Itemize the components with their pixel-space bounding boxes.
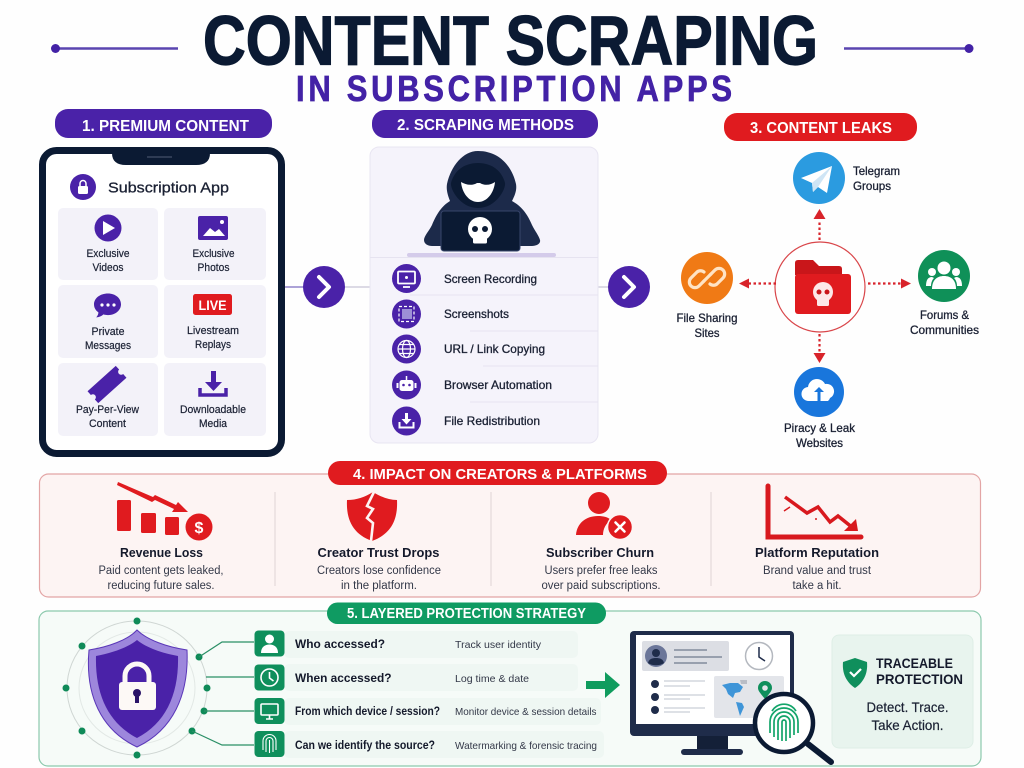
impact: creator trust drops: [317, 492, 441, 592]
impact: revenue loss: [98, 482, 224, 592]
connector lines between panels: [285, 286, 610, 288]
row: can we identify the source: Watermarking & forensic tracing: [455, 740, 597, 752]
magnifier with fingerprint: [755, 694, 831, 762]
impact: platform reputation: take a hit.: [792, 580, 842, 592]
heading: 2. scraping methods: [372, 110, 598, 138]
panel: scraping methods: [370, 147, 598, 443]
method: screen recording: Screen Recording: [444, 272, 537, 286]
world map with pin: [714, 676, 784, 718]
leak hub folder with skull: [775, 242, 865, 332]
icon: lock badge: [70, 174, 96, 200]
callout: traceable protection: TRACEABLE: [876, 655, 953, 671]
leak: telegram groups: [793, 152, 900, 204]
row: who accessed: Who accessed?: [295, 637, 385, 651]
method: screenshots: [392, 300, 509, 328]
impact: subscriber churn: [542, 492, 660, 592]
leak: file sharing sites: File Sharing: [676, 311, 738, 325]
panel: impact on creators and platforms: [40, 461, 980, 597]
card: pay-per-view content: [58, 363, 158, 436]
method: browser automation: [392, 370, 552, 400]
profile card: [642, 641, 729, 671]
impact: platform reputation: [755, 486, 879, 592]
impact: subscriber churn: Subscriber Churn: [546, 545, 654, 560]
arrows from hub: [739, 209, 911, 363]
leak: piracy and leak websites: Piracy & Leak: [784, 421, 856, 435]
card: downloadable media: Media: [199, 418, 228, 430]
card: downloadable media: [164, 363, 266, 436]
card: exclusive photos: Exclusive: [192, 248, 234, 260]
card: downloadable media: Downloadable: [180, 404, 246, 416]
title ornament right: [844, 44, 974, 53]
arrow: scraping methods to content leaks: [608, 266, 650, 308]
activity list: [651, 680, 705, 714]
card: pay-per-view content: Pay-Per-View: [76, 404, 139, 416]
impact: platform reputation: Platform Reputation: [755, 545, 879, 560]
heading: 2. scraping methods: 2. SCRAPING METHODS: [397, 117, 574, 134]
card: livestream replays: [164, 285, 266, 358]
impact: revenue loss: reducing future sales.: [108, 580, 214, 592]
heading: 4. impact: 4. IMPACT ON CREATORS & PLATFORMS: [353, 466, 647, 483]
card: pay-per-view content: Content: [89, 418, 126, 430]
method: url link copying: [392, 334, 545, 364]
leak: telegram groups: Groups: [853, 179, 891, 193]
card: exclusive photos: [164, 208, 266, 280]
clock: [746, 642, 772, 670]
impact: subscriber churn: over paid subscriptions.: [542, 580, 660, 592]
leak: forums and communities: [910, 250, 979, 337]
row: when accessed: When accessed?: [295, 671, 392, 685]
card: exclusive videos: Exclusive: [86, 248, 130, 260]
skull on laptop: [468, 217, 492, 244]
row: can we identify the source: Can we identify the source?: [295, 738, 435, 752]
callout: traceable protection: Take Action.: [872, 717, 944, 733]
card: livestream replays: Livestream: [187, 325, 239, 337]
callout: traceable protection: [832, 635, 973, 748]
heading: 3. content leaks: [724, 113, 917, 141]
impact: subscriber churn: Users prefer free leaks: [544, 565, 658, 577]
leak: file sharing sites: Sites: [694, 326, 720, 340]
impact: revenue loss: Revenue Loss: [120, 545, 203, 560]
icon: shield with lock and orbit: [62, 618, 210, 758]
panel: phone subscription app: [42, 150, 282, 454]
impact: revenue loss: Paid content gets leaked,: [98, 565, 224, 577]
impact: platform reputation: Brand value and trust: [763, 565, 872, 577]
card: private messages: Messages: [85, 340, 131, 352]
phone notch: [112, 150, 210, 165]
row: from which device or session: [254, 698, 601, 725]
impact: creator trust drops: Creators lose confidence: [317, 565, 441, 577]
icon: shield check: [843, 658, 867, 688]
method: screenshots: Screenshots: [444, 307, 509, 321]
row: from which device or session: From which device / session?: [295, 704, 440, 718]
connector lines: [192, 642, 254, 745]
method: browser automation: Browser Automation: [444, 378, 552, 392]
title: [203, 2, 818, 110]
panel: layered protection strategy: [39, 602, 981, 766]
card: private messages: [58, 285, 158, 358]
callout: traceable protection: Detect. Trace.: [866, 699, 948, 715]
heading: 3. content leaks: 3. CONTENT LEAKS: [750, 120, 892, 137]
impact: creator trust drops: in the platform.: [341, 580, 417, 592]
title ornament left: [51, 44, 178, 53]
heading: 5. layered protection: 5. LAYERED PROTECTION STRATEGY: [347, 606, 586, 622]
leak: piracy and leak websites: Websites: [796, 436, 843, 450]
diagram: content leaks: [676, 152, 979, 450]
method: url link copying: URL / Link Copying: [444, 342, 545, 356]
card: livestream replays: LIVE: [198, 297, 226, 313]
title: CONTENT SCRAPING: [203, 2, 818, 80]
card: exclusive videos: [58, 208, 158, 280]
heading: 5. layered protection: [327, 602, 606, 624]
row: from which device or session: Monitor device & session details: [455, 706, 596, 718]
heading: 1. premium content: [55, 109, 272, 138]
card: exclusive photos: Photos: [198, 262, 230, 274]
icon: hooded hacker with laptop: [407, 151, 556, 257]
impact: creator trust drops: Creator Trust Drops: [318, 545, 440, 560]
impact: revenue loss: $: [195, 520, 204, 537]
card: livestream replays: Replays: [195, 339, 231, 351]
heading: 4. impact: [328, 461, 667, 485]
card: private messages: Private: [92, 326, 124, 338]
row: can we identify the source: [254, 731, 604, 758]
leak: piracy and leak websites: [784, 367, 856, 450]
title: IN SUBSCRIPTION APPS: [296, 70, 732, 110]
row: when accessed: [254, 664, 578, 691]
leak: forums and communities: Communities: [910, 323, 979, 337]
leak: file sharing sites: [676, 252, 738, 340]
illustration: monitor with magnifier: [630, 631, 831, 762]
callout: traceable protection: PROTECTION: [876, 671, 963, 687]
method: screen recording: [392, 264, 537, 293]
method: file redistribution: File Redistribution: [444, 414, 540, 428]
row: who accessed: Track user identity: [455, 639, 542, 651]
arrow: to monitor: [586, 672, 620, 698]
arrow: premium content to scraping methods: [303, 266, 345, 308]
leak: telegram groups: Telegram: [853, 164, 900, 178]
heading: 1. premium content: 1. PREMIUM CONTENT: [82, 118, 249, 135]
leak: forums and communities: Forums &: [920, 308, 969, 322]
app title: Subscription App: [108, 180, 229, 196]
row: when accessed: Log time & date: [455, 673, 529, 685]
card: exclusive videos: Videos: [92, 262, 124, 274]
row: who accessed: [254, 630, 578, 658]
method: file redistribution: [392, 406, 540, 436]
